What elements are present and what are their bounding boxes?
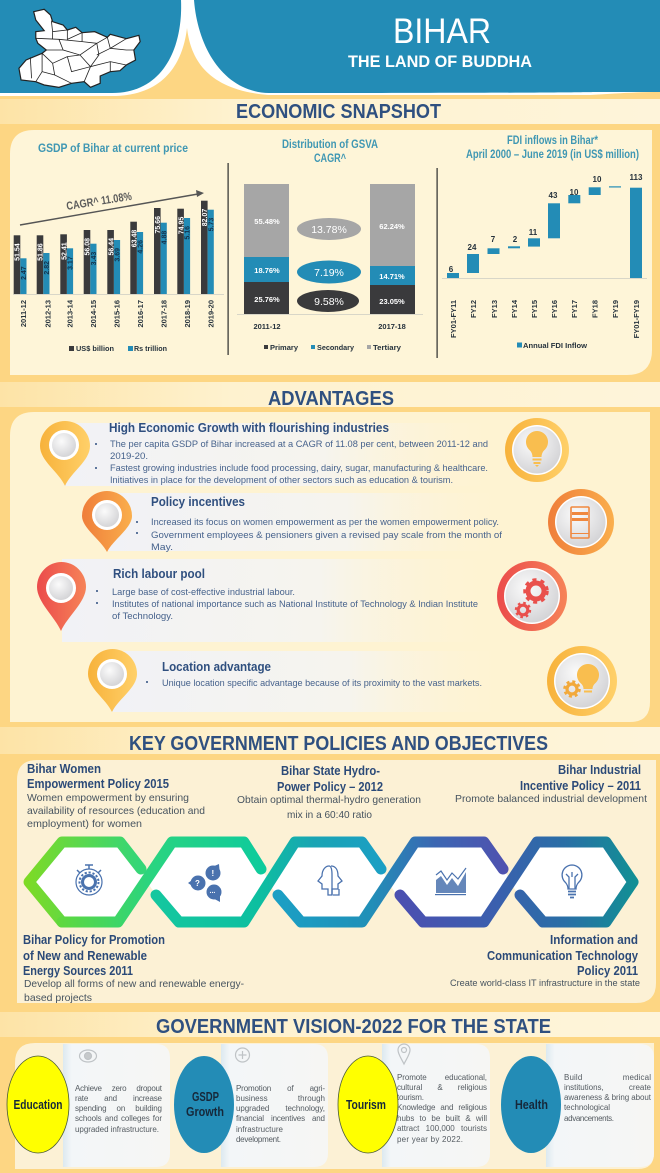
row: high economic growth [40, 420, 497, 486]
policy: women empowerment: employment) for women [27, 818, 142, 830]
bar chart: GSDP: 2017-18 [160, 300, 168, 328]
bar chart: GSDP: 2018-19 [183, 300, 192, 328]
bar chart: GSDP: 5.16 [185, 226, 192, 240]
row: policy incentives: Policy incentives [151, 494, 245, 509]
header blue panel left [0, 0, 181, 93]
legend: GSVA: Primary [270, 343, 299, 352]
row: high economic growth: Initiatives in place for the development of other sectors such as education & tourism. [110, 475, 453, 485]
legend: GSVA: Tertiary [373, 343, 402, 352]
bar chart: GSDP: 51.86 [38, 243, 45, 261]
stacked bar chart: GSVA: 2017-18 [378, 322, 406, 331]
row: rich labour pool: of Technology. [112, 611, 173, 621]
policy: renewable energy: Develop all forms of new and renewable energy- [24, 978, 244, 990]
badge: health: Health [515, 1097, 548, 1112]
title: BIHAR [393, 12, 491, 51]
badge: tourism [338, 1056, 398, 1153]
bar chart: GSDP: 2014-15 [89, 300, 98, 328]
policy: ICT: Information and [550, 933, 638, 947]
card: GSDP growth [221, 1044, 328, 1167]
stacked bar chart: GSVA [237, 184, 423, 331]
badge: education: Education [14, 1097, 63, 1112]
icon: light bulb [505, 418, 569, 482]
subtitle: THE LAND OF BUDDHA [348, 52, 532, 71]
policy: ICT: Create world-class IT infrastructure in the state [450, 978, 640, 988]
icon: eye [80, 1050, 96, 1062]
card: health: advancements. [564, 1114, 614, 1123]
stacked bar chart: GSVA: 14.71% [379, 272, 405, 281]
policy: women empowerment: Women empowerment by ensuring [27, 792, 189, 804]
policy: hydro power: Obtain optimal thermal-hydro generation [237, 794, 421, 806]
heading band: government vision [0, 1012, 660, 1038]
waterfall chart: FDI: FY15 [530, 300, 539, 318]
row: location advantage: Location advantage [162, 659, 271, 674]
arrow: CAGR trend: CAGR^ 11.08% [66, 191, 133, 213]
waterfall chart: FDI: 113 [630, 173, 643, 182]
row: rich labour pool: Large base of cost-effective industrial labour. [112, 587, 295, 597]
card: tourism: Knowledge and religious [397, 1103, 487, 1112]
CAGR ellipses: 9.58% [314, 296, 344, 308]
waterfall chart: FDI: FY01-FY11 [449, 300, 458, 338]
policy: women empowerment: availability of resources (education and [27, 805, 205, 817]
policy: ICT: Policy 2011 [577, 964, 638, 978]
card: education: Achieve zero dropout [75, 1084, 163, 1093]
bar chart: GSDP: 63.48 [131, 230, 138, 247]
icon: speech bubbles [188, 864, 222, 902]
bar chart: GSDP: 74.95 [178, 217, 185, 234]
row: policy incentives: May. [151, 542, 173, 552]
card: tourism: Promote educational, [397, 1073, 487, 1082]
heading band: key government policies: KEY GOVERNMENT POLICIES AND OBJECTIVES [129, 733, 548, 755]
heading band: government vision: GOVERNMENT VISION-2022 FOR THE STATE [156, 1016, 551, 1038]
waterfall chart: FDI: FY18 [590, 300, 600, 318]
map of Bihar [19, 9, 140, 87]
row: rich labour pool: Institutes of national importance such as National Institute of Technology & Indian Institute [112, 599, 478, 609]
hexagon chain [29, 842, 633, 922]
card: education: rate and increase [75, 1094, 163, 1103]
waterfall chart: FDI: FY14 [510, 299, 519, 318]
card: tourism: cultural & religious [397, 1083, 487, 1092]
bar chart: GSDP: 51.54 [15, 243, 22, 261]
card: GSDP growth: development. [236, 1135, 281, 1144]
icon: speech bubbles: ? [195, 879, 200, 888]
row: policy incentives: Government employees & pensioners given a revised pay scale from the month of [151, 530, 502, 540]
row: high economic growth: 2019-20. [110, 451, 148, 461]
card: GSDP growth: business through [236, 1094, 325, 1103]
badge: GSDP growth: Growth [186, 1104, 224, 1119]
waterfall chart: FDI: 2 [513, 235, 518, 244]
row: location advantage: Unique location specific advantage because of its proximity to the vast markets. [162, 678, 482, 688]
row: high economic growth: Fastest growing industries include food processing, dairy, sugar, manufacturing & healthcare. [110, 463, 488, 473]
bar chart: GSDP: 4.26 [138, 240, 145, 254]
policy: industrial incentive: Promote balanced industrial development [455, 793, 647, 805]
bar chart: GSDP: 5.73 [208, 218, 215, 231]
icon: stopwatch [76, 865, 102, 895]
policy: hydro power: mix in a 60:40 ratio [287, 809, 372, 821]
card: health: technological [564, 1103, 610, 1112]
bar chart: GSDP: 3.69 [115, 248, 122, 262]
card: education: spending on building [75, 1104, 162, 1113]
waterfall chart: FDI: 10 [593, 175, 602, 184]
header [0, 0, 660, 100]
pin [88, 649, 137, 712]
policy: hydro power [237, 764, 421, 821]
policy: hydro power: Power Policy – 2012 [277, 780, 383, 794]
waterfall chart: FDI: 6 [449, 265, 454, 274]
card: health: Build medical [564, 1073, 651, 1082]
icon: gears [497, 561, 567, 631]
bar chart: GSDP: 2011-12 [19, 300, 28, 327]
chart title: GSVA [282, 139, 378, 165]
legend: GSDP: Rs trillion [134, 344, 167, 353]
row: rich labour pool: Rich labour pool [113, 566, 205, 581]
row: high economic growth: The per capita GSDP of Bihar increased at a CAGR of 11.08 per cent, between 2011-12 and [110, 439, 488, 449]
policy: renewable energy: Energy Sources 2011 [23, 964, 133, 978]
legend: GSDP [69, 344, 167, 353]
panel: vision [15, 1043, 654, 1169]
waterfall chart: FDI: 24 [468, 243, 477, 252]
badge: tourism: Tourism [346, 1097, 386, 1112]
panel: policies [17, 760, 656, 1003]
icon: gear and bulb [547, 646, 617, 716]
card: GSDP growth: Promotion of agri- [236, 1084, 325, 1093]
chart title: GSVA: Distribution of GSVA [282, 139, 378, 151]
waterfall chart: FDI: FY16 [550, 300, 559, 318]
heading band: advantages: ADVANTAGES [268, 388, 394, 410]
heading band: key government policies [0, 727, 660, 755]
row: location advantage [88, 649, 505, 712]
bar chart: GSDP: 56.44 [108, 238, 115, 256]
policy: renewable energy: of New and Renewable [23, 949, 147, 963]
policy: ICT [450, 933, 640, 988]
stacked bar chart: GSVA: 55.48% [254, 217, 280, 226]
waterfall chart: FDI: 7 [491, 235, 496, 244]
bar chart: GSDP: 2019-20 [206, 300, 216, 328]
icon: location pin [398, 1044, 410, 1064]
policy: industrial incentive: Incentive Policy – 2011 [520, 779, 641, 793]
policy: women empowerment [27, 762, 205, 830]
stacked bar chart: GSVA: 18.76% [254, 266, 280, 275]
policy: renewable energy [23, 933, 244, 1004]
heading band: economic snapshot: ECONOMIC SNAPSHOT [236, 101, 441, 123]
row: policy incentives: Increased its focus on women empowerment as per the women empowerment policy. [151, 517, 499, 527]
card: education: upgraded infrastructure. [75, 1125, 159, 1134]
stacked bar chart: GSVA: 25.76% [254, 295, 280, 304]
panel: economic snapshot [10, 130, 652, 375]
chart title: GSVA: CAGR^ [314, 153, 346, 165]
icon: two heads [318, 866, 342, 895]
policy: ICT: Communication Technology [487, 949, 638, 963]
card: health [546, 1044, 654, 1167]
card: health: institutions, create [564, 1083, 652, 1092]
card: tourism [382, 1044, 490, 1167]
waterfall chart: FDI: FY17 [570, 300, 579, 318]
bar chart: GSDP: 2012-13 [44, 300, 52, 328]
waterfall chart: FDI: 11 [529, 228, 538, 237]
stacked bar chart: GSVA: 23.05% [379, 297, 405, 306]
chart title: FDI [466, 135, 639, 161]
badge: health [501, 1056, 561, 1153]
legend: FDI: Annual FDI Inflow [523, 341, 587, 350]
waterfall chart: FDI [442, 173, 647, 338]
card: GSDP growth: upgraded technology, [236, 1104, 325, 1113]
arrow: CAGR trend [20, 190, 204, 225]
CAGR ellipses [297, 218, 361, 312]
card: tourism: hubs to be built & will [397, 1114, 487, 1123]
card: GSDP growth: financial incentives and [236, 1114, 325, 1123]
badge: education [7, 1056, 69, 1153]
row: high economic growth: High Economic Growth with flourishing industries [109, 420, 389, 435]
bar chart: GSDP: 2013-14 [66, 299, 74, 328]
bar chart: GSDP: 3.43 [91, 252, 98, 265]
bar chart: GSDP: 2.47 [21, 266, 28, 280]
waterfall chart: FDI: FY13 [490, 300, 499, 318]
CAGR ellipses: 13.78% [311, 224, 347, 236]
bar chart: GSDP: 3.17 [68, 256, 75, 270]
bar chart: GSDP: 4.88 [161, 231, 168, 244]
card: tourism: tourism. [397, 1093, 424, 1102]
policy: hydro power: Bihar State Hydro- [281, 764, 380, 778]
bar chart: GSDP [13, 201, 224, 328]
stacked bar chart: GSVA: 62.24% [379, 222, 405, 231]
waterfall chart: FDI: FY12 [469, 300, 478, 318]
stacked bar chart: GSVA: 2011-12 [253, 322, 281, 331]
policy: women empowerment: Empowerment Policy 2015 [27, 777, 169, 791]
panel: advantages [10, 412, 650, 722]
chart title: FDI: FDI inflows in Bihar* [507, 135, 598, 147]
header blue panel right [194, 0, 660, 93]
row: policy incentives [82, 491, 505, 552]
bar chart: GSDP: 2.82 [44, 261, 51, 275]
badge: GSDP growth: GSDP [192, 1089, 219, 1104]
waterfall chart: FDI: 43 [549, 191, 558, 200]
row: rich labour pool [37, 559, 492, 642]
icon: light bulb [562, 865, 582, 898]
policy: industrial incentive [455, 763, 647, 805]
pin [82, 491, 132, 552]
bar chart: GSDP: 2015-16 [112, 300, 122, 328]
legend: GSDP: US$ billion [76, 344, 114, 353]
CAGR ellipses: 7.19% [314, 267, 344, 279]
policy: renewable energy: Bihar Policy for Promotion [23, 933, 165, 947]
pin [40, 421, 90, 486]
policy: renewable energy: based projects [24, 992, 92, 1004]
legend: GSVA [264, 343, 402, 352]
icon: speech bubbles: ... [210, 888, 215, 895]
chart title: GSDP: GSDP of Bihar at current price [38, 143, 188, 155]
policy: industrial incentive: Bihar Industrial [558, 763, 641, 777]
icon: speech bubbles: ! [212, 869, 214, 878]
bar chart: GSDP: 75.66 [155, 216, 162, 234]
card: tourism: attract 100,000 tourists [397, 1124, 487, 1133]
waterfall chart: FDI: FY19 [611, 300, 620, 318]
card: health: awareness & bring about [564, 1093, 652, 1102]
icon: growth chart [435, 868, 466, 895]
waterfall chart: FDI: FY01-FY19 [632, 300, 641, 338]
bar chart: GSDP: 82.07 [202, 209, 209, 226]
card: education: schools and colleges for [75, 1114, 162, 1123]
card: education [63, 1044, 170, 1167]
pin [37, 562, 86, 631]
bar chart: GSDP: 52.41 [61, 242, 68, 260]
card: GSDP growth: infrastructure [236, 1125, 284, 1134]
heading band: economic snapshot [0, 99, 660, 124]
policy: women empowerment: Bihar Women [27, 762, 101, 776]
bar chart: GSDP: 2016-17 [136, 300, 145, 328]
icon: tablet [548, 489, 614, 555]
bar chart: GSDP: 56.08 [85, 238, 92, 256]
heading band: advantages [0, 382, 660, 410]
legend: GSVA: Secondary [317, 343, 355, 352]
icon: plus [236, 1048, 250, 1062]
waterfall chart: FDI: 10 [570, 188, 579, 197]
badge: GSDP growth [174, 1056, 234, 1153]
card: tourism: per year by 2022. [397, 1135, 463, 1144]
